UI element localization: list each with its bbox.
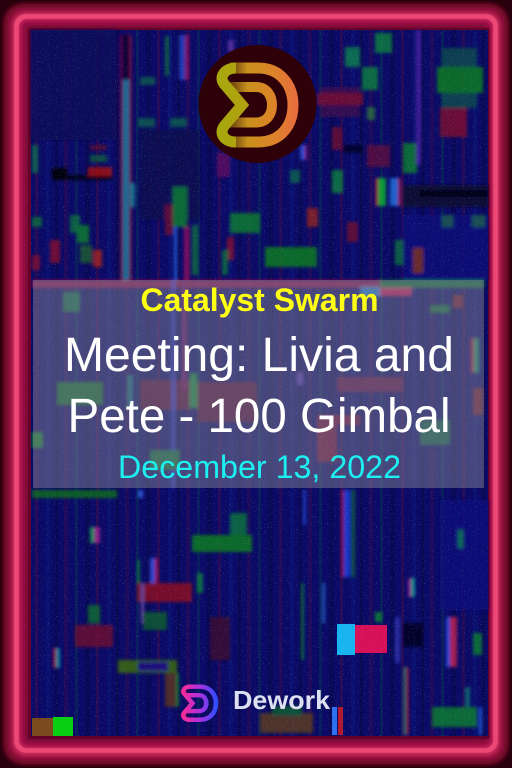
- colour blocks: [32, 624, 387, 736]
- heading: meeting title: Meeting: Livia and: [64, 329, 454, 382]
- footer brand: [183, 685, 331, 720]
- icon: D logo mark: [222, 68, 293, 142]
- heading: organisation: Catalyst Swarm: [140, 282, 378, 318]
- icon: Dework mark: [183, 687, 216, 720]
- heading: meeting title: Pete - 100 Gimbal: [68, 390, 450, 443]
- date: December 13, 2022: [118, 449, 401, 485]
- wordmark: Dework: [233, 685, 331, 715]
- heading: meeting title: [64, 329, 454, 443]
- top logo badge: [198, 45, 316, 163]
- title panel: [33, 280, 484, 488]
